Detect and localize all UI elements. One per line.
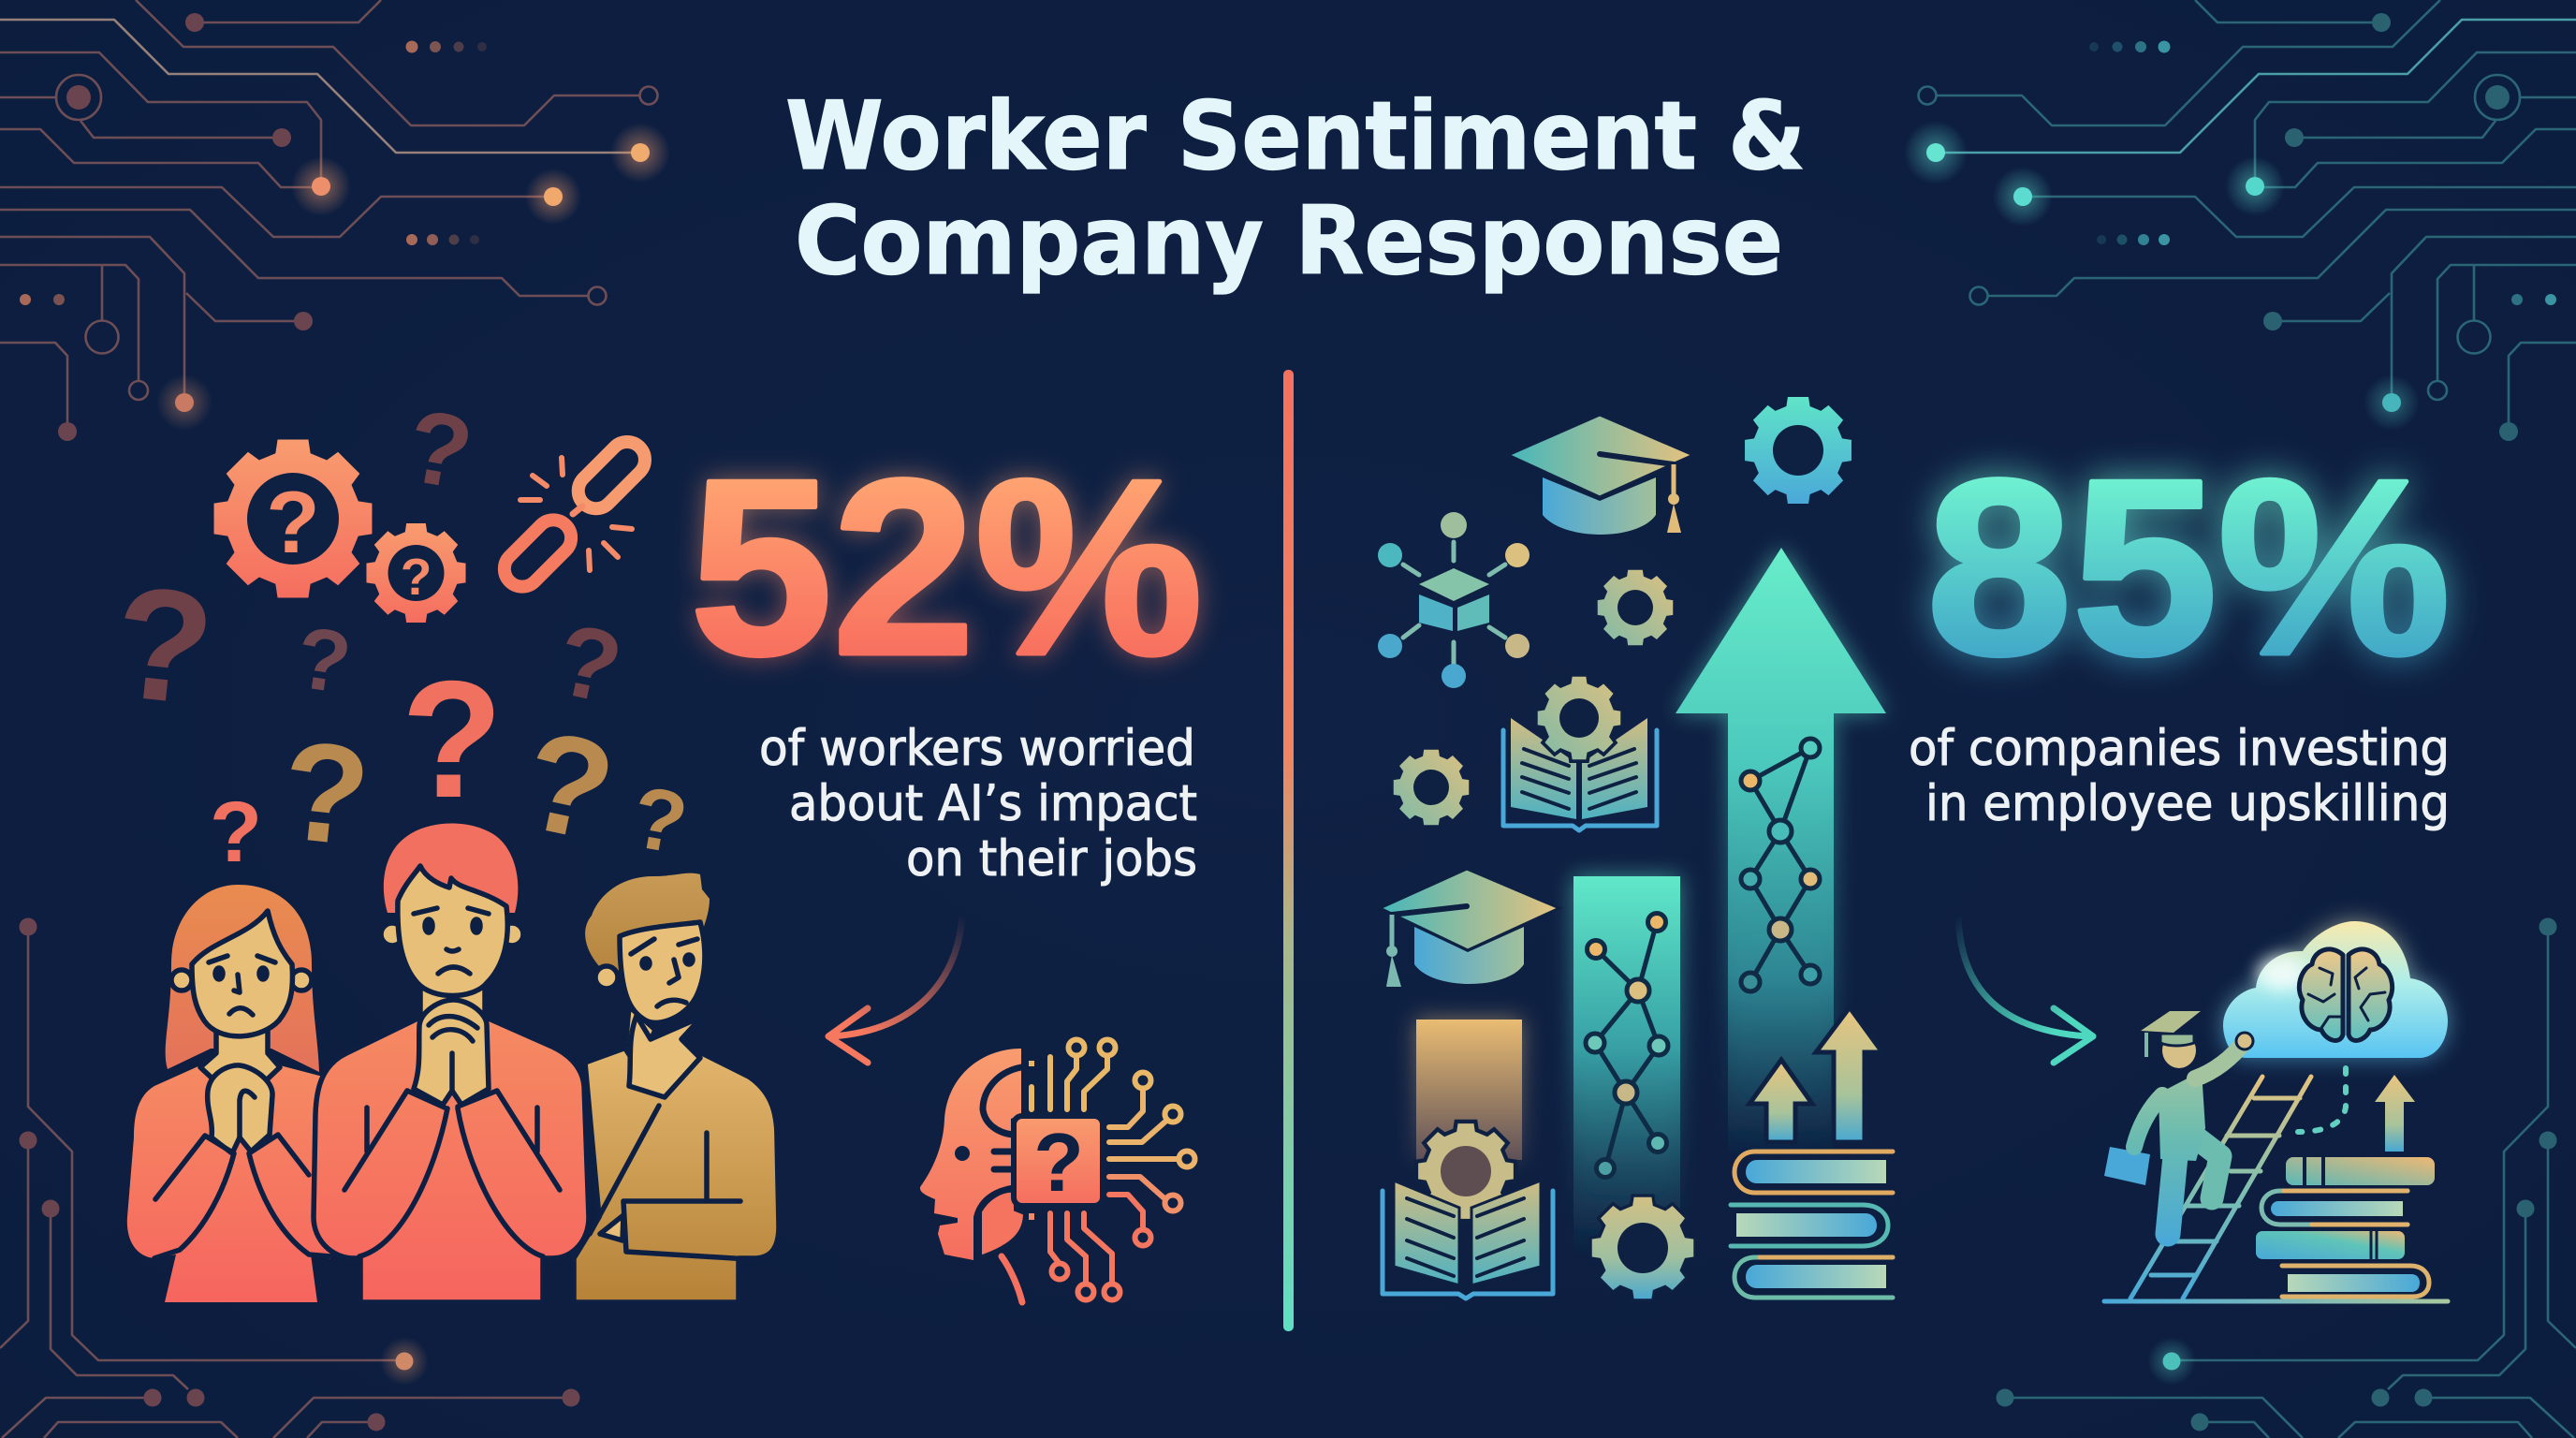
stat description: workers: on their jobs <box>906 830 1197 888</box>
chart: large growth arrow with network <box>1676 548 1886 1159</box>
icon: glowing cloud with brain <box>2223 921 2448 1058</box>
icon: large gear with question mark: ? <box>266 473 320 571</box>
question marks cloud: ? <box>106 552 221 740</box>
icon: graduation cap, top <box>1508 415 1693 535</box>
icon: graduation cap, lower <box>1380 869 1559 987</box>
chart: small gold bar <box>1416 1020 1522 1160</box>
illustration: worried woman, left <box>127 885 330 1302</box>
illustration: worried man, centre <box>314 824 589 1302</box>
stat: 52%: 52% <box>690 427 1203 707</box>
question marks cloud: ? <box>210 785 262 880</box>
stat description: companies <box>1909 720 2450 832</box>
question marks cloud: ? <box>399 388 480 512</box>
question marks cloud: ? <box>290 609 357 712</box>
title: Company Response <box>795 185 1783 296</box>
small up arrow <box>2375 1075 2415 1152</box>
icon: AI head with chip <box>920 1039 1194 1302</box>
question marks cloud: ? <box>274 711 376 875</box>
question marks cloud: ? <box>625 768 695 873</box>
ground line <box>2104 1299 2448 1303</box>
icon: small gear with question mark <box>366 523 466 623</box>
panel: worker sentiment <box>106 388 1203 1302</box>
stat description: workers: of workers worried <box>759 720 1195 777</box>
icon: small growth arrows <box>1749 1007 1882 1142</box>
icon: open book with gear, middle <box>1503 675 1657 830</box>
question marks cloud: ? <box>402 646 503 832</box>
ladder <box>2130 1077 2311 1299</box>
question marks cloud <box>106 388 695 880</box>
stat description: companies: of companies investing <box>1909 720 2450 777</box>
illustration: worried man, right <box>574 873 779 1302</box>
circuit pattern: right <box>1904 0 2576 1438</box>
icon: stack of three books <box>1731 1152 1893 1298</box>
icon: lower gear <box>1590 1196 1695 1300</box>
icon: network cube <box>1378 512 1530 688</box>
icon: AI head with chip: ? <box>1033 1116 1084 1209</box>
panel: company response <box>1378 397 2451 1301</box>
stat description: workers <box>759 720 1197 888</box>
central divider <box>1283 370 1294 1331</box>
climbing figure <box>2104 1011 2253 1234</box>
icon: small gear, left <box>1394 750 1469 825</box>
title: Worker Sentiment & <box>785 81 1806 191</box>
icon: top gear <box>1745 397 1852 504</box>
question marks cloud: ? <box>548 601 631 725</box>
illustration: climber reaching AI cloud <box>2104 921 2448 1301</box>
title <box>785 81 1806 296</box>
icon: large gear with question mark <box>214 440 372 597</box>
icon: small gear, right <box>1598 570 1673 645</box>
icon: small gear with question mark: ? <box>401 548 432 606</box>
chart: medium teal bar with network <box>1573 876 1680 1260</box>
icon: open book with gear, lower <box>1383 1122 1553 1299</box>
stat: 85%: 85% <box>1926 427 2451 707</box>
dotted connector <box>2298 1068 2346 1132</box>
circuit pattern: left <box>0 0 670 1438</box>
arrow: curved to AI head <box>828 916 962 1063</box>
stat description: companies: in employee upskilling <box>1925 775 2450 832</box>
arrow: curved to climber <box>1958 916 2093 1063</box>
stat description: workers: about AI’s impact <box>789 775 1197 832</box>
icon: broken chain <box>497 434 652 594</box>
icon: stack of books <box>2256 1157 2435 1297</box>
question marks cloud: ? <box>510 699 627 872</box>
